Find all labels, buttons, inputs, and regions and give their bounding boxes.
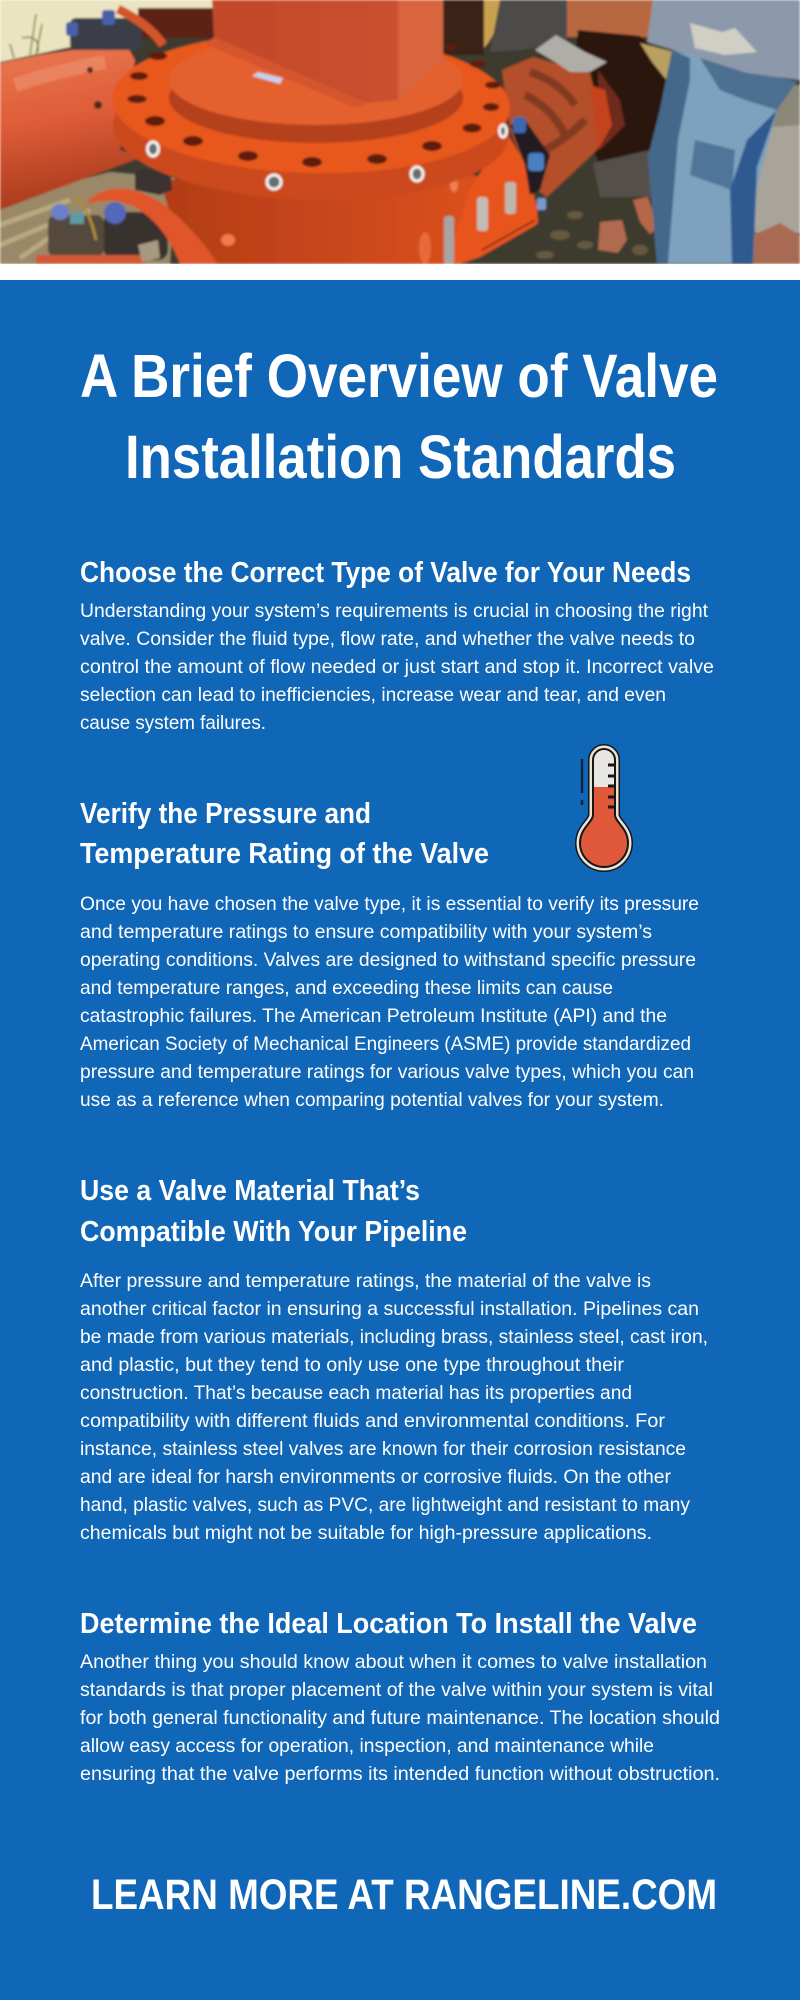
section 1 body text: control the amount of flow needed or just start and stop it. Incorrect valve: [80, 656, 714, 678]
section 2 body text: Once you have chosen the valve type, it is essential to verify its pressure: [80, 893, 699, 915]
section 2 body text: catastrophic failures. The American Petroleum Institute (API) and the: [80, 1005, 667, 1027]
section 1: choose the correct type of valve: [80, 557, 714, 734]
section 3 body text: another critical factor in ensuring a successful installation. Pipelines can: [80, 1298, 699, 1320]
section 2 body text: and temperature ratings to ensure compatibility with your system’s: [80, 921, 652, 943]
section 2 body text: [80, 893, 699, 1111]
section 3 heading: Use a Valve Material That’s: [80, 1175, 420, 1207]
section 3 body text: be made from various materials, including brass, stainless steel, cast iron,: [80, 1326, 708, 1348]
section 4 heading: Determine the Ideal Location To Install the Valve: [80, 1608, 697, 1640]
section 3 body text: and are ideal for harsh environments or corrosive fluids. On the other: [80, 1466, 671, 1488]
valve body: [160, 173, 536, 264]
title: A Brief Overview of Valve: [80, 342, 718, 410]
section 3 body text: hand, plastic valves, such as PVC, are lightweight and resistant to many: [80, 1494, 690, 1516]
section 3 body text: compatibility with different fluids and environmental conditions. For: [80, 1410, 666, 1432]
section 4 body text: allow easy access for operation, inspection, and maintenance while: [80, 1735, 654, 1757]
section 3 heading: Compatible With Your Pipeline: [80, 1216, 467, 1248]
icon: thermometer: [580, 749, 628, 867]
section 2: verify pressure and temperature rating: [80, 749, 699, 1111]
section 4 body text: standards is that proper placement of the valve within your system is vital: [80, 1679, 713, 1701]
lower left flange and bolts: [48, 215, 104, 257]
title: [80, 342, 718, 491]
section 4 body text: Another thing you should know about when it comes to valve installation: [80, 1651, 707, 1673]
section 3 heading: [80, 1175, 467, 1248]
section 1 heading: Choose the Correct Type of Valve for Your Needs: [80, 557, 691, 589]
section 4: determine the ideal location: [80, 1608, 720, 1785]
section 4 body text: for both general functionality and future maintenance. The location should: [80, 1707, 720, 1729]
section 3 body text: [80, 1270, 708, 1544]
section 2 heading: Verify the Pressure and: [80, 798, 371, 830]
section 4 body text: [80, 1651, 720, 1785]
section 2 heading: Temperature Rating of the Valve: [80, 838, 489, 870]
section 1 body text: selection can lead to inefficiencies, increase wear and tear, and even: [80, 684, 666, 706]
section 2 body text: operating conditions. Valves are designed to withstand specific pressure: [80, 949, 696, 971]
flange: [113, 114, 510, 198]
section 3 body text: and plastic, but they tend to only use one type throughout their: [80, 1354, 624, 1376]
section 3 body text: After pressure and temperature ratings, the material of the valve is: [80, 1270, 651, 1292]
title: Installation Standards: [125, 423, 676, 491]
section 2 body text: pressure and temperature ratings for various valve types, which you can: [80, 1061, 694, 1083]
section 1 body text: [80, 600, 714, 734]
section 3 body text: construction. That’s because each material has its properties and: [80, 1382, 632, 1404]
ground top left: [0, 0, 215, 62]
section 3: use a compatible valve material: [80, 1175, 708, 1544]
section 3 body text: chemicals but might not be suitable for high-pressure applications.: [80, 1522, 652, 1544]
section 2 body text: American Society of Mechanical Engineers (ASME) provide standardized: [80, 1033, 691, 1055]
section 2 heading: [80, 798, 489, 870]
section 4 body text: ensuring that the valve performs its intended function without obstruction.: [80, 1763, 720, 1785]
section 2 body text: use as a reference when comparing potential valves for your system.: [80, 1089, 664, 1111]
section 2 body text: and temperature ranges, and exceeding these limits can cause: [80, 977, 613, 999]
section 1 body text: Understanding your system’s requirements is crucial in choosing the right: [80, 600, 709, 622]
section 1 body text: cause system failures.: [80, 712, 266, 734]
section 1 body text: valve. Consider the fluid type, flow rate, and whether the valve needs to: [80, 628, 695, 650]
header photo: red valve on pipeline with worker: [0, 0, 800, 264]
section 3 body text: instance, stainless steel valves are known for their corrosion resistance: [80, 1438, 686, 1460]
